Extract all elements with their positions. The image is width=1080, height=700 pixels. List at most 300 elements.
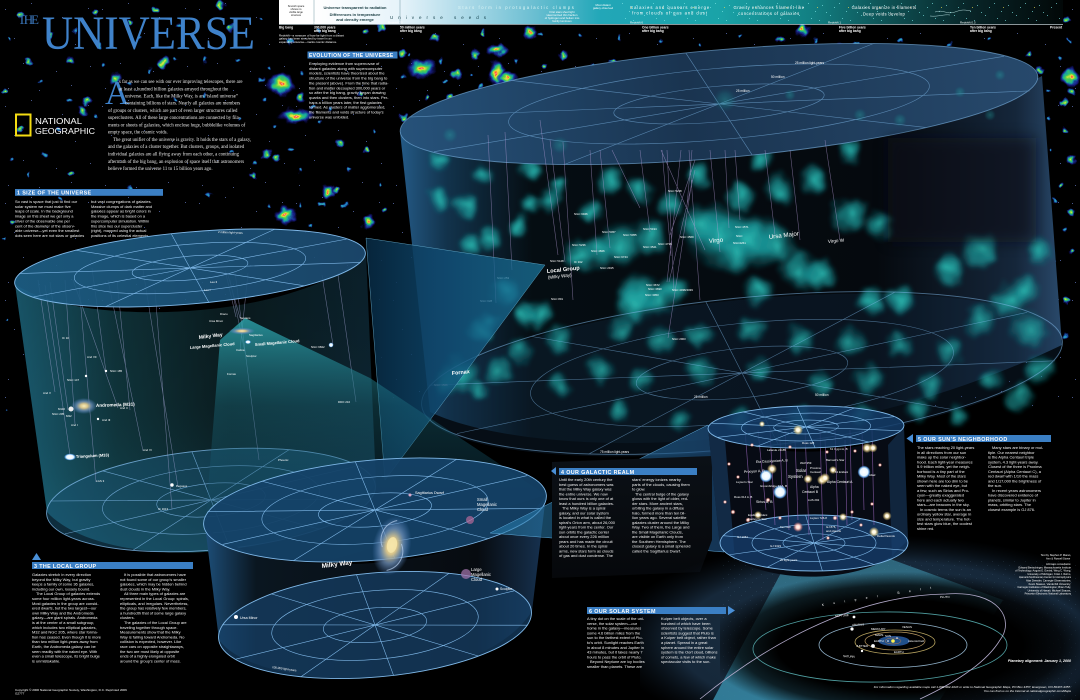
panel: our galactic realm bbox=[490, 425, 724, 578]
panel: the local group: some four million light-years across. bbox=[32, 596, 95, 601]
planet labels: Asteroid belt bbox=[908, 639, 924, 643]
local group labels bbox=[43, 280, 350, 511]
planet labels: SATURN bbox=[843, 654, 855, 659]
star labels: Centauri bbox=[810, 470, 821, 474]
lid of neighborhood bbox=[708, 404, 904, 450]
panel: size of the universe: image on this sheet we get only a bbox=[15, 214, 74, 219]
logo: National Geographic: NATIONAL bbox=[35, 116, 82, 126]
star labels: Centauri B bbox=[802, 490, 819, 494]
local group labels: Carina bbox=[236, 348, 245, 352]
local group labels: Leo II bbox=[210, 280, 217, 284]
local group labels: NGC 205 bbox=[52, 412, 64, 416]
panel: size of the universe bbox=[15, 189, 163, 238]
galactic labels: Magellanic bbox=[477, 502, 497, 507]
panel: our solar system: sun to the farthest extent of Plu- bbox=[587, 635, 644, 640]
panel: our sun's neighborhood: is the Alpha Centauri triple bbox=[988, 454, 1035, 460]
panel: the local group: It is possible that astronomers have bbox=[124, 572, 187, 577]
panel: evolution of the universe: universe was unfolded. bbox=[309, 114, 349, 119]
local group labels: And III bbox=[102, 418, 111, 422]
star labels: Wolf 359 bbox=[800, 461, 812, 465]
planet labels: URANUS bbox=[852, 622, 864, 627]
star labels: LHS 292 bbox=[808, 498, 820, 502]
local group labels: DDO 210 bbox=[338, 400, 350, 404]
pointer lines to local group members bbox=[38, 268, 356, 509]
labels placed on the wedge: Local Group and Fornax: (Milky Way) bbox=[548, 272, 572, 280]
timeline: evolution of the universe strip: Heat ionized thin fraction bbox=[547, 13, 578, 17]
local group labels: NGC 6822 bbox=[311, 345, 325, 349]
local group labels: LGS 3 bbox=[96, 479, 105, 483]
timeline: evolution of the universe strip: of hydrogen and helium into bbox=[545, 16, 580, 20]
panel: our solar system: Beyond Neptune are icy bodies bbox=[590, 659, 645, 664]
timeline: evolution of the universe strip: One billion years bbox=[642, 26, 669, 30]
panel: our solar system: 6 OUR SOLAR SYSTEM bbox=[589, 609, 656, 615]
planet labels: EARTH bbox=[894, 650, 904, 654]
panel: the local group: Measurements show that the Milky bbox=[120, 630, 181, 635]
panel: the local group: clusters. bbox=[120, 615, 135, 620]
local group labels: IC 1613 bbox=[158, 507, 169, 511]
timeline: evolution of the universe strip: 300,000 years bbox=[314, 26, 336, 30]
galaxy labels: NGC 1566 bbox=[434, 383, 448, 387]
timeline: evolution of the universe strip: Gravity enhances filament-like bbox=[733, 5, 805, 10]
panel: the local group: a hundredth that of some large galaxy bbox=[120, 610, 186, 615]
credits: Harvard-Smithsonian Center for Astrophysics bbox=[1019, 575, 1072, 579]
panel: our solar system: verse, the solar system—our bbox=[587, 621, 638, 626]
star labels: Barnard's Star bbox=[826, 458, 844, 462]
panel: evolution of the universe: the present (above). From the time that radia- bbox=[309, 80, 389, 85]
panel: our solar system: system is the Oort cloud, billions bbox=[661, 650, 717, 655]
panel: our galactic realm: 4 OUR GALACTIC REALM bbox=[561, 470, 635, 476]
panel: our sun's neighborhood: cyon—greatly exaggerated bbox=[917, 492, 964, 498]
panel: the local group: Way is falling toward Andromeda. No bbox=[120, 634, 185, 639]
galactic labels: Small bbox=[477, 497, 488, 502]
panel: our galactic realm: best guess of astronomers was bbox=[559, 482, 614, 487]
panel: our solar system: scientists suggest that Pluto is bbox=[661, 630, 714, 635]
galactic labels: Ursa Minor bbox=[240, 616, 258, 620]
solar system background nebula bbox=[640, 530, 1080, 700]
panel: evolution of the universe: distant galaxies along with supercomputer bbox=[309, 66, 383, 71]
star labels: Alpha bbox=[810, 485, 819, 489]
background: simulated large-scale structure of the cosmos bbox=[0, 0, 1080, 420]
panel: the local group: M32 and NGC 205, where star forma- bbox=[32, 630, 99, 635]
panel: size of the universe: cent of the diameter of the observ- bbox=[15, 223, 76, 228]
labels placed on the wedge: Local Group and Fornax: Fornax bbox=[452, 369, 470, 377]
panel: our galactic realm: of gas and dust condense. The bbox=[559, 553, 614, 558]
intro text block: aftermath of the big bang, an explosion of space itself that astronomers bbox=[108, 160, 244, 165]
galaxy labels: NGC 891 bbox=[551, 297, 563, 301]
local group labels: Draco bbox=[220, 312, 228, 316]
timeline: evolution of the universe strip: faintly luminous bbox=[552, 19, 572, 23]
local group labels: Fornax bbox=[227, 372, 237, 376]
timeline: evolution of the universe strip: Redshift ~1,000 bbox=[304, 20, 325, 24]
panel: the local group: than two million light-years away from bbox=[32, 639, 98, 644]
panel: our solar system: of comets, a few of which make bbox=[661, 654, 717, 659]
galactic labels: Magellanic bbox=[471, 572, 491, 577]
panel: size of the universe: solar system we must make five bbox=[15, 204, 72, 209]
local group labels: Phoenix bbox=[278, 458, 289, 462]
planet labels: VENUS bbox=[902, 625, 912, 629]
planet labels: MERCURY bbox=[871, 627, 886, 631]
panel: our sun's neighborhood: here and each actually two bbox=[917, 497, 965, 502]
credits: Ann & Russell Stowe bbox=[1046, 556, 1071, 560]
timeline: evolution of the universe strip: Galaxies organize in filaments bbox=[852, 5, 916, 10]
timeline: evolution of the universe strip bbox=[279, 0, 1063, 44]
star labels: Groombridge 34 A, B bbox=[760, 484, 787, 488]
timeline: evolution of the universe strip: 50 million years bbox=[400, 26, 425, 30]
galaxy labels: NGC 6946 bbox=[574, 212, 588, 216]
panel: size of the universe: the image, which is based on a bbox=[91, 214, 146, 219]
intro text block: believe formed the universe 11 to 15 billion years ago. bbox=[108, 167, 213, 172]
panel: our sun's neighborhood: stars—are beacons in the sky. bbox=[917, 502, 970, 507]
stars bbox=[723, 421, 892, 540]
panel: our galactic realm: Until the early 20th century the bbox=[559, 477, 613, 482]
panel: our sun's neighborhood: test stars glow blue, the coolest bbox=[917, 521, 973, 526]
planetary alignment note: Planetary alignment: January 1, 2000 bbox=[1008, 659, 1071, 663]
panel: our sun's neighborhood: ordinary yellow star, average in bbox=[917, 512, 971, 516]
timeline: evolution of the universe strip: concentrations of galaxies bbox=[738, 11, 800, 16]
local group labels: Sculptor bbox=[246, 354, 257, 358]
panel: the local group: the two are most likely at opposite bbox=[120, 649, 180, 654]
panel: evolution of the universe: the filaments and voids structure of today’s bbox=[309, 110, 384, 114]
intro text block: empty space, the cosmic voids. bbox=[108, 130, 168, 136]
logo: National Geographic bbox=[16, 114, 95, 136]
credits: Kevin Stassun, Vanderbilt University; bbox=[1029, 582, 1071, 586]
panel: size of the universe: this slice lies our supercluster bbox=[91, 223, 143, 228]
galaxy labels: NGC 2903 bbox=[672, 337, 686, 341]
panel: our galactic realm: arms, new stars form as clouds bbox=[559, 548, 614, 553]
panel: our sun's neighborhood: a few, such as Sirius and Pro- bbox=[917, 488, 970, 493]
panel: our galactic realm: sun orbits the galactic center bbox=[559, 529, 610, 534]
panel: our sun's neighborhood: 5 OUR SUN’S NEIGHBORHOOD bbox=[918, 437, 1008, 443]
galaxy labels: NGC 5128 bbox=[550, 259, 564, 263]
logo: National Geographic: GEOGRAPHIC bbox=[35, 126, 95, 136]
timeline: evolution of the universe strip: Present bbox=[1050, 26, 1063, 30]
panel: size of the universe: but vast congregations of galaxies. bbox=[91, 199, 152, 204]
panel: our galactic realm: are visible on Earth only from bbox=[632, 534, 684, 539]
panel: our solar system: Kuiper belt objects, over a bbox=[661, 616, 707, 621]
galactic labels: Sculptor bbox=[500, 587, 513, 591]
timeline: evolution of the universe strip: First stars shed light bbox=[549, 10, 575, 14]
base grid of the supercluster cylinder bbox=[414, 266, 1070, 480]
panel: our galactic realm: spiral’s Orion arm, about 26,000 bbox=[559, 520, 616, 525]
timeline: evolution of the universe strip: after big bang bbox=[400, 29, 422, 33]
star labels: Eta Cassiopeiae A, B bbox=[756, 458, 789, 464]
galactic labels: Large bbox=[471, 567, 482, 572]
local group labels: And VII bbox=[87, 355, 97, 359]
panel: the local group: keeps a family of some 36 galaxies, bbox=[32, 582, 94, 587]
panel: our galactic realm: Way. Two of them, the Large and bbox=[632, 524, 690, 530]
local group labels: Pegasus bbox=[176, 484, 188, 488]
panel: the local group: race cars on opposite straightaways, bbox=[120, 644, 184, 649]
panel: the local group: traveling together through space. bbox=[120, 625, 178, 630]
panel: the local group: The galaxies of the Local Group are bbox=[124, 620, 187, 625]
credits: of Technology; August E. Evrard, Wing C. Wong, bbox=[1015, 569, 1071, 573]
cluster labels: 25 million bbox=[694, 395, 708, 399]
galaxy labels: NGC 5236 bbox=[572, 243, 586, 247]
title: THE bbox=[18, 12, 39, 27]
cluster labels bbox=[600, 61, 845, 454]
timeline: evolution of the universe strip: Redshift 20 bbox=[388, 20, 403, 24]
credits: University of Michigan; Kristi J. Rehm, bbox=[1027, 572, 1071, 576]
wedge: milky way zoom into galactic realm bbox=[205, 318, 546, 570]
cylinder: our sun's neighborhood bbox=[708, 404, 908, 577]
panel: the local group: ered dwarfs, but the two largest—our bbox=[32, 606, 97, 611]
panel: size of the universe: So vast is space that just to find our bbox=[15, 199, 78, 204]
galaxy labels: NGC 5055 bbox=[623, 233, 637, 237]
star labels: Ross 614 A, B bbox=[734, 495, 752, 499]
galaxy labels: NGC 2915 bbox=[600, 266, 614, 270]
panel: evolution of the universe: so after the big bang, gravity began drawing bbox=[309, 90, 386, 95]
panel: evolution of the universe: haps a billion years later, the first galaxies bbox=[309, 100, 382, 105]
timeline: evolution of the universe strip: Galaxies and quasars emerge bbox=[630, 5, 710, 10]
panel: the local group: collision is expected, however. Like bbox=[120, 639, 182, 644]
panel: our solar system: some 4.6 billion miles from the bbox=[587, 630, 641, 635]
panel: our sun's neighborhood: mass, orbiting stars. The bbox=[988, 502, 1032, 507]
panel: our galactic realm: lion years ago. Several satellite bbox=[632, 515, 687, 520]
panel: our galactic realm: about 20 times. In the spiral bbox=[559, 544, 607, 548]
panel: the local group: around the group’s center of mass. bbox=[120, 658, 181, 663]
local group labels: Leo I bbox=[204, 288, 211, 292]
panel: our sun's neighborhood: shown here are too dim to be bbox=[917, 478, 969, 483]
panel: our solar system: a planet. Spread in a great bbox=[661, 640, 708, 645]
panel: our galactic realm: least a hundred billion galaxies. bbox=[559, 501, 614, 506]
panel: our sun's neighborhood: borhood is a tiny part of the bbox=[917, 469, 966, 474]
star labels: Sirius A, B bbox=[756, 500, 773, 504]
panel: our sun's neighborhood: have discovered evidence of bbox=[988, 492, 1039, 498]
panel: our sun's neighborhood bbox=[906, 434, 1051, 531]
panel: our sun's neighborhood: Closest of the three is Proxima bbox=[988, 464, 1042, 469]
panel: our solar system bbox=[587, 606, 735, 669]
lid of the local group cylinder: 2 million light-years bbox=[218, 230, 243, 235]
lid of the supercluster cylinder bbox=[396, 22, 1042, 186]
panel: the local group: own Milky Way and the Andromeda bbox=[32, 610, 94, 615]
timeline: evolution of the universe strip: visible large bbox=[289, 10, 303, 14]
timeline: evolution of the universe strip: after big bang bbox=[314, 29, 336, 33]
panel: the local group: dust clouds in the Milky Way. bbox=[120, 586, 170, 591]
panel: our galactic realm: that the Milky Way galaxy was bbox=[559, 486, 612, 492]
galaxy pointer lines bbox=[488, 120, 840, 338]
credits: University of Hawaii; Michael Strauss, bbox=[1028, 588, 1071, 592]
panel: evolution of the universe: quarks and then clusters, then into stars. Per- bbox=[309, 95, 389, 100]
timeline: evolution of the universe strip: galaxy has been stretched by travel in an bbox=[279, 37, 332, 41]
local group labels: And V bbox=[43, 391, 51, 395]
planet labels: MARS bbox=[875, 633, 883, 637]
labels placed on the wedge: Local Group and Fornax bbox=[452, 266, 581, 377]
star labels: Ross 128 bbox=[802, 441, 815, 445]
pointer lines to stars bbox=[745, 430, 874, 540]
panel: our sun's neighborhood: make up the solar neighbor- bbox=[917, 454, 967, 460]
panel: our galactic realm: is located in what is called the bbox=[559, 515, 612, 520]
panel: our solar system: smaller than planets. These are bbox=[587, 664, 643, 669]
cluster labels: 25 million light-years bbox=[795, 61, 824, 65]
panel: our sun's neighborhood: hood. Each light-year measures bbox=[917, 459, 973, 464]
base grid of neighborhood bbox=[720, 515, 908, 571]
timeline: evolution of the universe strip: galaxy observed bbox=[593, 6, 614, 10]
star labels: GJ 3323 bbox=[770, 544, 781, 548]
intro text block: of groups or clusters, which are part of even larger structures called bbox=[108, 109, 238, 114]
local group labels: IC 10 bbox=[62, 336, 69, 340]
panel: our sun's neighborhood: planets, similar to Jupiter in bbox=[988, 497, 1036, 502]
panel: the local group bbox=[32, 553, 193, 663]
base grid of the galactic cylinder bbox=[214, 560, 536, 690]
galaxy labels: NGC 3690 bbox=[648, 287, 662, 291]
panel: our solar system: a Kuiper belt object, rather than bbox=[661, 635, 716, 640]
timeline: evolution of the universe strip: Universe transparent to radiation bbox=[324, 5, 387, 10]
panel: our galactic realm: stars’ energy ionizes nearby bbox=[632, 477, 681, 482]
local group labels: Sagittarius bbox=[249, 333, 263, 337]
local group labels: M32 bbox=[66, 414, 72, 418]
local group labels: NGC 147 bbox=[67, 378, 79, 382]
panel: our solar system: to’s orbit. Sunlight reaches Earth bbox=[587, 640, 644, 645]
panel: the local group: seen readily with the naked eye. With bbox=[32, 649, 97, 654]
panel: our sun's neighborhood: and 1/17,000 the brightness of bbox=[988, 478, 1042, 483]
local group labels: Small Magellanic Cloud bbox=[255, 338, 300, 347]
solar system diagram bbox=[700, 565, 1080, 700]
credits: Text by Stephen P. Maran, bbox=[1041, 553, 1071, 557]
base grid of the galactic cylinder: 100,000 light-years bbox=[272, 665, 297, 672]
timeline: evolution of the universe strip: Stars form in protogalactic clumps bbox=[458, 5, 575, 10]
cluster labels: Ursa Major bbox=[768, 230, 799, 241]
panel: evolution of the universe bbox=[308, 52, 398, 119]
panel: the local group: Most galaxies in the group are consid- bbox=[32, 601, 99, 606]
credits bbox=[1015, 553, 1072, 596]
panel: the local group: The Local Group of galaxies extends bbox=[36, 591, 100, 596]
timeline: evolution of the universe strip: expanding universe—marks cosmic distance. bbox=[279, 40, 337, 44]
wedge: sun zoom into solar system bbox=[713, 528, 1003, 700]
planet labels: SUN bbox=[885, 634, 891, 638]
panel: our galactic realm: orbiting the galaxy in a diffuse bbox=[632, 506, 685, 510]
panel: evolution of the universe: formed. As clusters of matter agglomerated, bbox=[309, 105, 385, 110]
panel: the local group: Earth, the Andromeda galaxy can be bbox=[32, 644, 97, 649]
galaxy labels: NGC 4569 bbox=[680, 235, 694, 239]
intro text block: The great unifier of the universe is gravity. It holds the stars of a galaxy, bbox=[113, 138, 251, 143]
panel: the local group: beyond the Milky Way, but gravity bbox=[32, 577, 90, 582]
timeline: evolution of the universe strip: Universe seeds bbox=[390, 15, 491, 20]
panel: size of the universe: Massive clumps of dark matter and bbox=[91, 204, 152, 209]
planet labels: JUPITER bbox=[856, 644, 868, 648]
panel: size of the universe: supercomputer simulation. Within bbox=[91, 218, 149, 223]
intro text block: ments or sheets of galaxies, which enclose huge, bubblelike volumes of bbox=[108, 124, 246, 128]
timeline: evolution of the universe strip: Big bang bbox=[279, 26, 293, 30]
timeline: evolution of the universe strip: from clouds of gas and dust bbox=[632, 10, 708, 16]
planet labels: EARTH bbox=[874, 639, 884, 643]
timeline: evolution of the universe strip: Most distant bbox=[595, 3, 611, 7]
local group labels: NGC 185 bbox=[110, 369, 122, 373]
cluster labels: 75 million light-years bbox=[600, 450, 629, 454]
star labels: 61 Eridani bbox=[835, 470, 848, 474]
timeline: evolution of the universe strip: Smooth space bbox=[288, 4, 305, 8]
star labels: Lalande 21185 bbox=[767, 448, 786, 452]
panel: our sun's neighborhood: shine red. bbox=[917, 526, 934, 531]
intro text block: universe. Each, like the Milky Way, is an “island universe” bbox=[125, 94, 238, 100]
galaxy labels: NGC 3521 bbox=[643, 245, 657, 249]
panel: our sun's neighborhood: the sun. bbox=[988, 483, 1002, 488]
intro text block: containing billions of stars. Nearly all galaxies are members bbox=[125, 102, 240, 106]
panel: our sun's neighborhood: closest example is GJ 876. bbox=[988, 507, 1035, 512]
star labels: 61 Cygni A, B bbox=[830, 447, 848, 451]
panel: our solar system: A tiny dot on the scale of the uni- bbox=[587, 616, 645, 621]
star labels: Luyten's Star bbox=[736, 480, 753, 484]
cylinder: the local group bbox=[12, 217, 546, 570]
title: UNIVERSE bbox=[42, 7, 255, 60]
local group labels: Andromeda (M31) bbox=[96, 402, 135, 408]
panel: our solar system: hundred of which have been bbox=[661, 621, 710, 626]
panel: our galactic realm: galaxies cluster around the Milky bbox=[632, 520, 689, 525]
panel: our galactic realm: to glow. bbox=[632, 486, 645, 492]
galaxies of the local group bbox=[64, 328, 334, 487]
panel: our galactic realm: der stars. More ancient stars, bbox=[632, 501, 683, 506]
panel: the local group: including our own, loosely bound. bbox=[32, 586, 90, 591]
intro text block: at least a hundred billion galaxies arrayed throughout the bbox=[119, 88, 228, 92]
panel: our galactic realm: parts of the clouds, causing them bbox=[632, 482, 691, 487]
panel: size of the universe: positions of its celestial elements. bbox=[91, 233, 149, 238]
panel: our galactic realm: The Milky Way is a spiral bbox=[562, 506, 606, 510]
galaxy labels bbox=[434, 189, 749, 387]
panel: our sun's neighborhood: seen with the naked eye, but bbox=[917, 483, 968, 488]
galactic labels: Sagittarius Dwarf bbox=[415, 491, 445, 495]
galaxy labels: NGC 4826 bbox=[591, 249, 605, 253]
star labels: System bbox=[788, 474, 803, 479]
panel: the local group: ends of a highly elongated orbit bbox=[120, 654, 176, 659]
intro text block bbox=[105, 75, 252, 172]
planets bbox=[850, 616, 898, 652]
panel: the local group: is at the center of a small subgroup, bbox=[32, 620, 94, 625]
galactic labels bbox=[234, 491, 513, 620]
galaxy labels: NGC 3953 bbox=[645, 293, 659, 297]
panel: our solar system: home in the galaxy—measures bbox=[587, 626, 641, 631]
star labels: Luyten 726-8 bbox=[810, 516, 827, 520]
star labels: Alpha Centauri A bbox=[827, 480, 853, 484]
intro text block: superclusters. All of these large concentrations are connected by fila- bbox=[108, 116, 241, 121]
panel: our galactic realm: the entire universe. We now bbox=[559, 491, 608, 496]
star labels: Proxima bbox=[810, 466, 821, 470]
panel: the local group: represented in the Local Group: spirals, bbox=[120, 596, 189, 601]
credits: Edward Bertschinger, Massachusetts Institute bbox=[1019, 565, 1072, 569]
icon: milky way spiral bbox=[367, 513, 417, 579]
galactic labels: Cloud bbox=[471, 577, 483, 582]
star labels: Tau Ceti bbox=[780, 525, 791, 529]
galaxy labels: NGC 4736 bbox=[658, 242, 672, 246]
galaxy labels: NGC4261 bbox=[733, 241, 746, 245]
cluster labels: Virgo W bbox=[828, 238, 845, 244]
star labels: Epsilon Eridani bbox=[748, 513, 768, 517]
cluster labels: 50 million bbox=[771, 75, 785, 79]
local group labels: And I bbox=[71, 423, 78, 427]
galactic labels: Milky Way bbox=[321, 559, 353, 570]
dark backing for the supercluster text bbox=[888, 138, 1036, 242]
timeline: evolution of the universe strip: Deep voids develop bbox=[863, 12, 905, 16]
panel: the local group: which includes two elliptical galaxies, bbox=[32, 625, 97, 630]
star labels bbox=[734, 441, 895, 562]
panel: our galactic realm: know that ours is only one of at bbox=[559, 496, 614, 501]
panel: our sun's neighborhood: Centauri (Alpha Centauri C), a bbox=[988, 469, 1042, 474]
lid of the galactic cylinder bbox=[199, 445, 551, 575]
panel: evolution of the universe: models, scientists have theorized about the bbox=[309, 71, 385, 76]
teal galaxy clouds bbox=[426, 136, 1056, 436]
credits: Alan Dressler, Carnegie Observatories; bbox=[1026, 578, 1071, 582]
cluster labels: 50 million bbox=[815, 393, 829, 397]
footer: map ordering information: You can find us on the Internet at nationalgeographic.com/Maps bbox=[983, 689, 1071, 693]
panel: size of the universe: dots seen here are not stars or galaxies bbox=[15, 233, 84, 238]
galaxy labels: NGC 4571 bbox=[735, 225, 749, 229]
panel: size of the universe: able universe—yet even the smallest bbox=[15, 228, 80, 233]
cluster labels: 25 million bbox=[736, 89, 750, 93]
galaxy labels: NGC 5194 bbox=[643, 227, 657, 231]
local group labels: M110 bbox=[58, 407, 65, 411]
wedge: local group zoom into supercluster bbox=[366, 238, 545, 480]
local group labels: Large Magellanic Cloud bbox=[190, 341, 235, 350]
panel: evolution of the universe: structure of the universe from the big bang to bbox=[309, 76, 388, 81]
timeline: evolution of the universe strip: structure bbox=[291, 13, 302, 17]
